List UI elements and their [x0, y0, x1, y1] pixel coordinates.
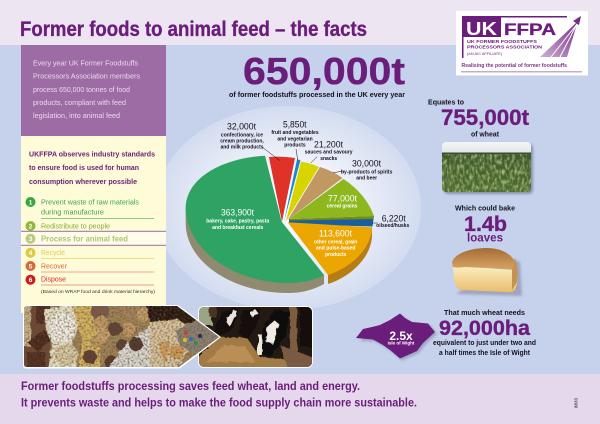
step 3 highlighted band [21, 231, 166, 246]
reference code: 8833 [574, 397, 578, 408]
step 6 [26, 275, 154, 286]
photo: wheat field [442, 142, 533, 194]
step 1: Prevent waste of raw materials [41, 200, 140, 207]
label: 6,220t: 6,220t [382, 213, 406, 223]
glow behind pie [155, 106, 421, 310]
icon: Isle of Wight: Isle of Wight [388, 340, 415, 346]
title: Former foods to animal feed – the facts [20, 18, 367, 41]
label: 30,000t: and beer [356, 175, 377, 181]
photo: bread loaf [452, 248, 522, 296]
step 6: 6 [29, 277, 33, 284]
panel: intro text: legislation, into animal feed [33, 113, 120, 120]
slice: fruit and veg blue [284, 160, 300, 222]
label: 32,000t: cream production, [220, 138, 264, 144]
panel: intro text: products, compliant with feed [33, 100, 126, 107]
label: 5,850t: products [284, 143, 306, 149]
loaves word: loaves [467, 231, 503, 245]
label: 6,220t: oilseed/husks [376, 223, 409, 229]
label: 32,000t: confectionary, ice [221, 133, 263, 139]
label: 113,600t: products [325, 252, 347, 258]
slice: other cereal orange [288, 222, 372, 275]
footer band [0, 374, 600, 424]
photo: cows feeding [196, 305, 314, 370]
pie chart [186, 120, 409, 293]
label: 363,900t: 363,900t [221, 208, 254, 218]
label: 363,900t: bakery, cake, pastry, pasta [206, 218, 269, 224]
label: 5,850t [271, 120, 319, 149]
slice: sauces yellow [286, 162, 319, 222]
logo: UK FFPA: Realising the potential of former foodstuffs [462, 63, 567, 69]
icon: Isle of Wight: 2.5x [389, 329, 413, 343]
label: 21,200t [305, 139, 353, 162]
label: 5,850t: 5,850t [283, 120, 307, 130]
step 3 highlighted band: 3 [29, 236, 33, 243]
panel: intro text: Every year UK Former Foodstuffs [33, 60, 139, 68]
label: 77,000t: cereal grains [327, 203, 358, 209]
equates to label: Equates to [428, 98, 464, 107]
label: 113,600t: and pulse-based [316, 245, 355, 251]
label: 30,000t: 30,000t [352, 159, 381, 169]
step 2 [26, 221, 110, 231]
step 1 [26, 197, 154, 219]
label: 113,600t: other cereal, grain [314, 239, 357, 245]
hierarchy heading [29, 152, 155, 186]
panel: intro text: process 650,000 tonnes of food [33, 87, 130, 94]
panel: food hierarchy [21, 136, 166, 313]
label: 77,000t [327, 194, 358, 209]
photo: food products [20, 302, 222, 371]
green slice side [186, 208, 324, 293]
label: 113,600t: 113,600t [319, 229, 352, 239]
label: 113,600t [314, 229, 357, 258]
step 1: 1 [29, 200, 33, 206]
red slice side [269, 157, 282, 221]
step 5: 5 [29, 264, 33, 270]
headline figure: 650,000t [243, 51, 405, 93]
step 5 [26, 261, 154, 272]
header band [0, 0, 600, 45]
step 3 highlighted band: Process for animal feed [41, 234, 128, 243]
leader lines [262, 147, 378, 223]
lime edge [289, 216, 374, 221]
label: 77,000t: 77,000t [328, 194, 357, 204]
logo: UK FFPA: (AN AIC AFFILIATE) [467, 52, 502, 56]
step 4: Recycle [41, 250, 65, 257]
wheat caption: of wheat [471, 132, 500, 139]
logo: UK FFPA [456, 11, 588, 76]
panel: intro text [21, 45, 166, 136]
label: 21,200t: sauces and savoury [305, 150, 353, 156]
icon: Isle of Wight [356, 314, 437, 360]
loaves figure: 1.4b [464, 213, 507, 236]
logo: UK FFPA: FFPA [504, 20, 556, 39]
label: 363,900t [206, 208, 269, 231]
orange slice side [328, 227, 372, 284]
footer message [21, 379, 417, 410]
label: 32,000t [220, 121, 264, 151]
label: 363,900t: and breakfast cereals [212, 225, 263, 231]
land caption: a half times the Isle of Wight [439, 348, 530, 357]
land caption: equivalent to just under two and [433, 338, 536, 347]
slice: bakery green [186, 156, 324, 283]
logo: UK FFPA: UK FORMER FOODSTUFFS [467, 39, 538, 45]
land caption [433, 338, 536, 357]
label: 5,850t: and vegetarian [277, 137, 313, 143]
slice: confectionery red [269, 157, 295, 222]
label: 32,000t: 32,000t [227, 121, 256, 131]
wheat figure: 755,000t [441, 105, 530, 130]
wheat land label: That much wheat needs [444, 308, 525, 317]
label: 21,200t: 21,200t [314, 139, 343, 149]
which could bake label: Which could bake [455, 204, 515, 213]
step 6: Dispose [41, 277, 66, 284]
label: 30,000t: by-products of spirits [341, 169, 393, 175]
source note: (Based on WRAP food and drink material hierarchy) [41, 289, 156, 294]
step 4: 4 [29, 250, 33, 257]
logo: UK FFPA: UK [466, 19, 497, 39]
step 1: during manufacture [41, 210, 104, 217]
step 5: Recover [41, 263, 68, 270]
label: 32,000t: and milk products [220, 145, 264, 151]
label: 5,850t: fruit and vegetables [271, 130, 319, 136]
slice: by-products tan [288, 167, 342, 220]
hierarchy heading: UKFFPA observes industry standards [29, 152, 155, 158]
label: 30,000t [341, 159, 393, 181]
step 2: 2 [29, 224, 33, 230]
logo: UK FFPA: PROCESSORS ASSOCIATION [467, 44, 543, 50]
slice: oilseed blue [289, 219, 374, 226]
land figure: 92,000ha [439, 317, 530, 340]
hierarchy heading: consumption wherever possible [29, 179, 137, 186]
label: 6,220t [376, 213, 409, 229]
footer message: Former foodstuffs processing saves feed wheat, land and energy. [21, 379, 360, 393]
label: 21,200t: snacks [320, 156, 337, 162]
step 4 [26, 248, 154, 259]
hierarchy heading: to ensure food is used for human [29, 165, 139, 172]
step 2: Redistribute to people [41, 223, 110, 230]
panel: intro text: Processors Association members [33, 74, 141, 80]
footer message: It prevents waste and helps to make the food supply chain more sustainable. [21, 396, 417, 410]
headline caption: of former foodstuffs processed in the UK every year [229, 90, 405, 99]
slice: cereal grains lime [289, 179, 374, 219]
